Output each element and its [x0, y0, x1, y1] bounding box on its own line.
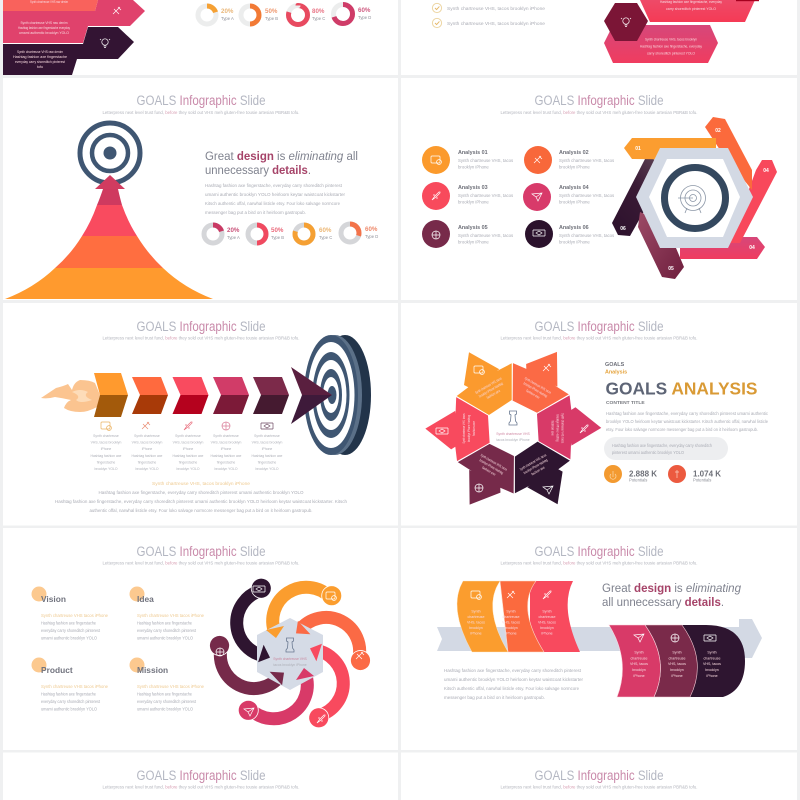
step 1: [91, 422, 122, 471]
curved card: orange: [457, 581, 508, 652]
analysis 02: Synth chartreuse VHS, tacos: [559, 158, 614, 163]
curved card: orange-red: iPhone: [505, 632, 517, 636]
body text: etsy. Four loko salvage normcore messenger bag put a bird on it heirloom gastropub.: [606, 427, 758, 432]
block: vision: Synth chartreuse VHS tacos iPhone: [41, 613, 109, 618]
donut labels: Type C: [319, 235, 332, 240]
analysis 04: Analysis 04: [559, 185, 589, 191]
curved card: dark: Synth: [707, 650, 717, 654]
step 2: fingerstache: [138, 460, 156, 464]
block: vision: Vision: [41, 594, 66, 604]
slide: goals analysis star: [401, 303, 797, 526]
donut labels: Type C: [312, 16, 325, 21]
step 5: Hashtag fashion axe: [252, 454, 283, 458]
block: product: [32, 658, 109, 712]
stat: 1.074 K: 1.074 K: [693, 470, 721, 478]
body text: umami authentic brooklyn YOLO heirloom keytar waistcoat kickstarter: [444, 677, 584, 682]
body text: Hashtag fashion axe fingerstache, everyday carry shoreditch pinterest: [205, 183, 343, 188]
analysis 03: Analysis 03: [458, 185, 488, 191]
block: product: everyday carry shoreditch pinterest: [41, 699, 101, 704]
caption text: Hashtag fashion axe fingerstache, everyday carry shoreditch pinterest umami authentic brooklyn YOLO: [98, 490, 304, 495]
curved card: dark: iPhone: [706, 674, 718, 678]
star piece: maroon: brooklyn iPhone Hashtag: [479, 458, 504, 475]
step 3: Hashtag fashion axe: [173, 454, 204, 458]
curved card: maroon: Synth: [672, 650, 682, 654]
dark arrow band: [3, 27, 134, 75]
chevron 2: [132, 377, 168, 414]
salmon arrow band: Synth chartreuse VHS raw denim: [30, 0, 68, 4]
curved card: orange: VHS, tacos: [467, 620, 485, 624]
band 01: [624, 138, 716, 160]
step 2: VHS, tacos brooklyn: [132, 440, 162, 444]
body text: Hashtag fashion axe fingerstache, everyday carry shoreditch pinterest: [444, 668, 582, 673]
star piece: orange-red: Synth chartreuse VHS, tacos: [524, 376, 552, 395]
swirl icons: [216, 586, 364, 723]
step 5: fingerstache: [258, 460, 276, 464]
checklist: Synth chartreuse VHS, tacos brooklyn iPhone: [447, 6, 546, 11]
band text: Synth chartreuse VHS raw denim: [20, 21, 68, 25]
curved card: dark: [682, 625, 745, 697]
block: product: umami authentic brooklyn YOLO: [41, 706, 98, 712]
curved card: rose: chartreuse: [631, 656, 647, 660]
analysis 05: Analysis 05: [458, 225, 488, 231]
swirl arm: rose: [238, 673, 307, 720]
curved card: maroon: brooklyn: [670, 668, 684, 672]
hexagon diagram: [612, 117, 777, 279]
stat: 2.888 K: Potentials: [629, 478, 647, 482]
step 3: Synth chartreuse: [175, 434, 201, 438]
analysis 06: Synth chartreuse VHS, tacos: [559, 233, 614, 238]
slide: curved cards on arrow: [401, 528, 797, 750]
block: mission: umami authentic brooklyn YOLO: [137, 706, 194, 712]
step 4: iPhone: [221, 447, 231, 451]
analysis 04: [523, 183, 614, 211]
chevron 4: [213, 377, 249, 414]
star piece: red: Synth chartreuse VHS, tacos: [462, 413, 466, 443]
subtitle: Letterpress next level trust fund, before they sold out VHS meh gluten-free tousie artesian PBR&B tofu.: [500, 336, 698, 340]
body text: Kitsch authentic offal, narwhal listicle etsy. Four loko salvage normcore: [444, 686, 580, 691]
icon: crosshair: [113, 7, 121, 14]
step 4: brooklyn YOLO: [214, 467, 238, 471]
caption text: authentic offal, narwhal listicle etsy. Four loko salvage normcore messenger bag put a bird on it heirloom gastropub.: [90, 508, 312, 513]
slide: top left hexagon arrows (cropped): [3, 0, 398, 75]
donut labels: Type A: [227, 235, 240, 240]
target: [80, 123, 140, 183]
band 06: [612, 159, 680, 236]
donut labels: 20%: [227, 227, 240, 234]
subtitle: Letterpress next level trust fund, before they sold out VHS meh gluten-free tousie artesian PBR&B tofu.: [102, 784, 299, 790]
subtitle: Letterpress next level trust fund, before they sold out VHS meh gluten-free tousie artesian PBR&B tofu.: [102, 560, 299, 566]
curved card: red: Synth: [542, 610, 552, 614]
block: idea: Hashtag fashion axe fingerstache: [137, 620, 193, 626]
stat: 2.888 K: [604, 465, 657, 483]
donut row: [198, 4, 352, 24]
block: vision: [32, 586, 109, 640]
analysis 03: brooklyn iPhone: [458, 200, 489, 204]
donut labels: [227, 226, 378, 240]
star piece: dark: [515, 442, 570, 504]
analysis 02: [524, 146, 614, 174]
curved card: orange: Synth: [471, 610, 481, 614]
slide: six analysis items and hexagon: [401, 78, 797, 300]
heading: Great design is eliminating: [602, 581, 741, 595]
crimson arrow band: [3, 0, 145, 43]
analysis 01: Analysis 01: [458, 150, 488, 156]
analysis 06: [525, 220, 614, 248]
curved card: rose: iPhone: [633, 674, 645, 678]
analysis 04: Synth chartreuse VHS, tacos: [559, 193, 614, 198]
star piece: rose: Synth chartreuse VHS, tacos: [561, 413, 565, 443]
star piece: orange: brooklyn iPhone Hashtag: [478, 382, 504, 398]
lower band: carry shoreditch pinterest YOLO: [647, 52, 695, 56]
heading: unnecessary details.: [205, 163, 311, 177]
donut labels: 60%: [365, 226, 378, 233]
donut labels: Type B: [265, 16, 278, 21]
block: vision: everyday carry shoreditch pinterest: [41, 628, 101, 633]
analysis 01: [422, 146, 513, 174]
curved card: red: [530, 581, 580, 652]
star centre: tacos brooklyn iPhone: [496, 438, 530, 442]
analysis 01: brooklyn iPhone: [458, 164, 489, 170]
step 3: fingerstache: [179, 460, 197, 464]
top band: [640, 0, 759, 22]
band 05: [638, 212, 684, 279]
curved card: orange-red: Synth: [506, 610, 516, 614]
band 02: [705, 117, 752, 190]
large heading: GOALS ANALYSIS: [606, 378, 758, 398]
star piece: orange-red: brooklyn iPhone Hashtag: [523, 381, 548, 398]
step 5: Synth chartreuse: [254, 434, 280, 438]
dark arrow band: Synth chartreuse VHS raw denim: [17, 50, 63, 54]
step 2: Synth chartreuse: [134, 434, 160, 438]
star piece: dark: brooklyn iPhone Hashtag: [523, 458, 548, 475]
band text: umami authentic brooklyn YOLO: [19, 31, 69, 35]
heading: all unnecessary details.: [602, 595, 724, 609]
inner hexagon: [649, 159, 740, 237]
step 4: [211, 422, 242, 471]
lower band: Hashtag fashion axe fingerstache, everyday: [640, 44, 702, 48]
star piece: rose: [526, 386, 607, 465]
step 1: Synth chartreuse: [93, 434, 119, 438]
donut row: [204, 224, 359, 243]
curved card: red: chartreuse: [539, 615, 555, 619]
block: idea: Synth chartreuse VHS tacos iPhone: [137, 613, 205, 618]
band text: Hashtag fashion axe fingerstache everyday: [18, 26, 70, 30]
curved card: orange-red: VHS, tacos: [502, 620, 520, 624]
chevron 5: [253, 377, 289, 414]
curved card: dark: VHS, tacos: [703, 662, 721, 666]
checklist: [432, 3, 546, 28]
curved card: orange: iPhone: [470, 632, 482, 636]
analysis 03: Synth chartreuse VHS, tacos: [458, 193, 513, 198]
block: product: Synth chartreuse VHS tacos iPhone: [41, 684, 109, 689]
step 5: iPhone: [262, 447, 272, 451]
step 1: iPhone: [101, 447, 111, 451]
swirl arm: maroon: [206, 618, 281, 702]
step 1: VHS, tacos brooklyn: [91, 440, 121, 444]
outer hexagon: [636, 148, 753, 248]
curved card: orange-red: brooklyn: [504, 626, 518, 630]
subtitle: Letterpress next level trust fund, before they sold out VHS meh gluten-free tousie artesian PBR&B tofu.: [500, 560, 698, 566]
dark hexagon with bulb icon: [604, 3, 648, 41]
title: GOALS Infographic Slide: [534, 544, 664, 559]
callout pill: pinterest umami authentic brooklyn YOLO: [612, 450, 685, 455]
curved card: maroon: iPhone: [671, 674, 683, 678]
curved card: red: iPhone: [541, 632, 553, 636]
body text: messenger bag put a bird on it heirloom gastropub.: [444, 695, 545, 700]
slide: bottom right header (cropped): [401, 752, 797, 800]
analysis 06: brooklyn iPhone: [559, 240, 590, 244]
bullseye target: [304, 335, 371, 455]
block: idea: [130, 586, 205, 640]
body text: Kitsch authentic offal, narwhal listicle etsy. Four loko salvage normcore: [205, 201, 341, 206]
band 04: [680, 237, 765, 259]
small heading: Analysis: [605, 370, 627, 376]
curved card: rose: VHS, tacos: [630, 662, 648, 666]
big arrow head: [291, 367, 332, 424]
curved card: maroon: chartreuse: [669, 656, 685, 660]
heading: [205, 149, 358, 177]
title: GOALS Infographic Slide: [534, 93, 664, 108]
star piece: rose: brooklyn iPhone Hashtag: [556, 415, 560, 442]
heading: [602, 581, 741, 609]
block: idea: Idea: [137, 594, 154, 604]
curved card: red: VHS, tacos: [538, 620, 556, 624]
step 3: iPhone: [183, 447, 193, 451]
top band: carry shoreditch pinterest YOLO: [666, 7, 716, 11]
band numbers: 04: [749, 245, 755, 251]
donut labels: Type A: [221, 16, 234, 21]
band numbers: 01: [635, 146, 641, 152]
step 3: [173, 422, 204, 471]
band numbers: [620, 128, 769, 272]
swirl centre text: [273, 638, 308, 667]
curved card: maroon: [645, 625, 697, 697]
donut labels: 50%: [271, 227, 284, 234]
mountain arrow: [5, 175, 213, 299]
subtitle: Letterpress next level trust fund, before they sold out VHS meh gluten-free tousie artesian PBR&B tofu.: [500, 110, 698, 115]
star piece: orange-red: fashion axe: [525, 389, 540, 400]
donut labels: 20%: [221, 8, 234, 15]
dark arrow band: Hashtag fashion axe fingerstache: [13, 55, 67, 59]
swirl arm: orange-red: [299, 604, 374, 688]
step 3: VHS, tacos brooklyn: [173, 440, 203, 444]
star piece: orange-red: [497, 341, 578, 420]
curved card: orange-red: [500, 581, 544, 652]
star piece: red: [419, 392, 501, 471]
step 1: brooklyn YOLO: [94, 467, 118, 471]
star piece: rose: fashion axe: [551, 421, 555, 436]
step 3: brooklyn YOLO: [176, 467, 200, 471]
curved card: orange-red: chartreuse: [503, 615, 519, 619]
block: mission: Hashtag fashion axe fingerstache: [137, 692, 193, 696]
heading: Great design is eliminating all: [205, 149, 358, 163]
salmon arrow band: [3, 0, 98, 11]
star piece: red: fashion axe: [472, 421, 476, 436]
step 4: Synth chartreuse: [213, 434, 239, 438]
block: product: Product: [41, 665, 73, 675]
stat: 2.888 K: 2.888 K: [629, 470, 657, 478]
star piece: dark: fashion axe: [531, 465, 546, 476]
body text: messenger bag put a bird on it heirloom gastropub.: [205, 210, 306, 215]
body text: [606, 411, 769, 432]
subtitle: Letterpress next level trust fund, before they sold out VHS meh gluten-free tousie artesian PBR&B tofu.: [102, 336, 299, 340]
slide: rocket target: [3, 78, 398, 300]
curved card: dark: chartreuse: [704, 656, 720, 660]
block: mission: [130, 658, 205, 712]
star centre: [496, 411, 531, 442]
donut labels: 80%: [312, 8, 325, 15]
caption text: [55, 481, 348, 513]
dark arrow band: tofu: [37, 65, 43, 69]
donut labels: Type D: [365, 234, 378, 239]
curved card: dark: brooklyn: [705, 668, 719, 672]
slide: top right checklist and hexagon bands (cropped): [401, 0, 797, 75]
gray arrow: [437, 619, 762, 658]
band 03: [725, 160, 777, 243]
step 4: VHS, tacos brooklyn: [211, 440, 241, 444]
donut labels: [221, 7, 371, 21]
star piece: maroon: fashion axe: [481, 466, 496, 477]
caption text: Hashtag fashion axe fingerstache, everyday carry shoreditch pinterest umami authentic brooklyn YOLO heirloom keytar waistcoat kickstarter. Kitsch: [55, 499, 348, 504]
step 5: VHS, tacos brooklyn: [252, 440, 282, 444]
top band: Hashtag fashion axe fingerstache, everyday: [660, 0, 722, 4]
star piece: maroon: [448, 436, 530, 515]
checklist: Synth chartreuse VHS, tacos brooklyn iPhone: [447, 21, 546, 26]
title: GOALS Infographic Slide: [136, 768, 266, 783]
block: idea: everyday carry shoreditch pinterest: [137, 628, 197, 633]
swirl arrow tips: [255, 619, 325, 687]
band numbers: 02: [715, 128, 721, 134]
dark arrow band: everyday carry shoreditch pinterest: [15, 60, 65, 64]
step 2: iPhone: [142, 447, 152, 451]
subtitle: Letterpress next level trust fund, before they sold out VHS meh gluten-free tousie artesian PBR&B tofu.: [500, 784, 698, 790]
caption text: Synth chartreuse VHS, tacos brooklyn iPhone: [152, 481, 251, 486]
step 5: brooklyn YOLO: [255, 467, 279, 471]
small heading: [605, 362, 627, 376]
step 1: Hashtag fashion axe: [91, 454, 122, 458]
body text: Hashtag fashion axe fingerstache, everyday carry shoreditch pinterest umami authentic: [606, 411, 769, 416]
subtitle: Letterpress next level trust fund, before they sold out VHS meh gluten-free tousie artesian PBR&B tofu.: [102, 110, 299, 115]
slide: chevrons into target: [3, 303, 398, 526]
curved card: maroon: VHS, tacos: [668, 662, 686, 666]
analysis 06: Analysis 06: [559, 225, 589, 231]
star piece: orange: fashion axe: [486, 389, 501, 400]
body text: umami authentic brooklyn YOLO heirloom keytar waistcoat kickstarter: [205, 192, 346, 197]
block: mission: everyday carry shoreditch pinterest: [137, 699, 197, 704]
callout pill: Hashtag fashion axe fingerstache, everyday carry shoreditch: [612, 443, 713, 448]
band numbers: 06: [620, 226, 626, 232]
donut labels: Type D: [358, 15, 371, 20]
step 2: brooklyn YOLO: [135, 467, 159, 471]
swirl centre hexagon: [257, 618, 323, 690]
icon: target with arrow: [678, 186, 706, 213]
step 4: Hashtag fashion axe: [211, 454, 242, 458]
stat: 1.074 K: [668, 465, 721, 483]
swirl centre text: tacos brooklyn iPhone: [273, 663, 307, 667]
block: mission: Mission: [137, 665, 168, 675]
curved card: orange: brooklyn: [469, 626, 483, 630]
analysis 03: [422, 182, 513, 210]
block: product: Hashtag fashion axe fingerstache: [41, 692, 97, 696]
slide: bottom left header (cropped): [3, 752, 398, 800]
star piece: orange: Synth chartreuse VHS, tacos: [475, 376, 503, 395]
lower band: Synth chartreuse VHS, tacos brooklyn: [645, 38, 697, 42]
title: GOALS Infographic Slide: [534, 768, 664, 783]
title: GOALS Infographic Slide: [136, 544, 266, 559]
donut labels: 60%: [358, 7, 371, 14]
content title: CONTENT TITLE: [606, 400, 645, 406]
step 2: Hashtag fashion axe: [132, 454, 163, 458]
donut labels: 50%: [265, 8, 278, 15]
title: GOALS Infographic Slide: [136, 319, 266, 334]
analysis 02: Analysis 02: [559, 150, 589, 156]
donut labels: Type B: [271, 235, 284, 240]
target ring: [664, 168, 726, 228]
body text: [205, 183, 346, 215]
analysis 05: brooklyn iPhone: [458, 240, 489, 244]
curved card: red: brooklyn: [540, 626, 554, 630]
flame: [41, 380, 100, 412]
star piece: red: brooklyn iPhone Hashtag: [467, 415, 471, 442]
lower band: [604, 25, 718, 63]
analysis 01: Synth chartreuse VHS, tacos: [458, 158, 513, 163]
callout pill: [604, 437, 728, 460]
curved card: orange: chartreuse: [468, 615, 484, 619]
band numbers: 05: [668, 266, 674, 272]
block: vision: umami authentic brooklyn YOLO: [41, 636, 98, 640]
block: mission: Synth chartreuse VHS tacos iPhone: [137, 684, 205, 689]
step 2: [132, 422, 163, 471]
swirl arm: dark: [223, 575, 299, 658]
block: vision: Hashtag fashion axe fingerstache: [41, 620, 97, 626]
slide: swirl diagram: [3, 528, 398, 750]
analysis 05: Synth chartreuse VHS, tacos: [458, 233, 513, 238]
small heading: GOALS: [605, 362, 625, 368]
star centre: Synth chartreuse VHS: [496, 432, 531, 436]
curved card: rose: brooklyn: [632, 668, 646, 672]
star piece: maroon: Synth chartreuse VHS, tacos: [480, 453, 508, 472]
analysis 02: brooklyn iPhone: [559, 164, 590, 170]
body text: brooklyn YOLO heirloom keytar waistcoat kickstarter. Kitsch authentic offal, narwhal listicle: [606, 419, 769, 424]
swirl arm: red: [281, 648, 357, 731]
band numbers: 04: [763, 168, 769, 174]
star piece: orange: [457, 352, 512, 415]
star piece: dark: Synth chartreuse VHS, tacos: [519, 453, 547, 472]
step 1: fingerstache: [97, 460, 115, 464]
donut labels: 60%: [319, 227, 332, 234]
chevron 3: [172, 377, 208, 414]
swirl centre text: Synth chartreuse VHS: [273, 657, 308, 661]
step 4: fingerstache: [217, 460, 235, 464]
title: GOALS Infographic Slide: [136, 93, 266, 108]
curved card: rose: Synth: [634, 650, 644, 654]
analysis 04: brooklyn iPhone: [559, 200, 590, 204]
band text: [18, 21, 70, 35]
title: GOALS Infographic Slide: [534, 319, 664, 334]
curved card: rose: [609, 625, 660, 697]
step 5: [252, 423, 283, 471]
block: idea: umami authentic brooklyn YOLO: [137, 636, 194, 640]
body text: [444, 668, 584, 700]
icon: bulb: [100, 39, 110, 48]
chevron 1: [94, 373, 128, 417]
stat: 1.074 K: Potentials: [693, 478, 711, 482]
swirl arm: orange: [273, 586, 342, 633]
analysis 05: [422, 220, 513, 248]
